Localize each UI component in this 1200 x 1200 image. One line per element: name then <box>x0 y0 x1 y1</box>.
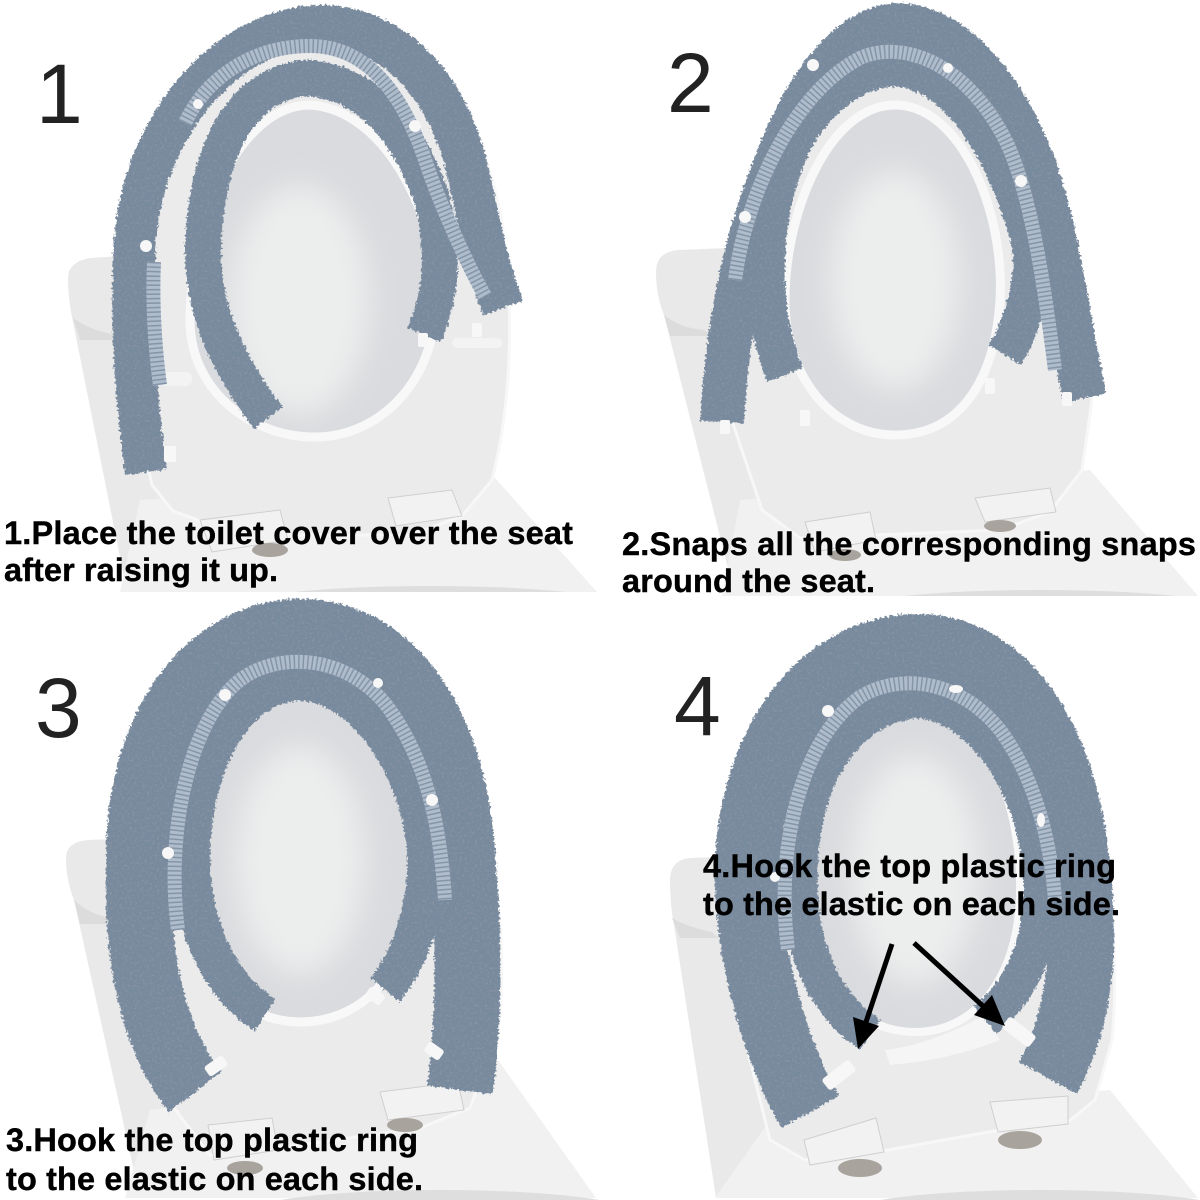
arrow: to right ring <box>914 943 1005 1026</box>
caption 3: to the elastic on each side. <box>6 1161 423 1197</box>
caption 4: to the elastic on each side. <box>703 886 1120 922</box>
seat cover, outer strand <box>748 647 1081 1112</box>
toilet seat <box>728 618 1115 1177</box>
snaps and plastic rings <box>770 685 1045 1091</box>
snaps <box>720 59 1072 434</box>
caption 1 <box>4 515 573 588</box>
caption 3 <box>6 1122 423 1197</box>
panel: step 2 <box>622 25 1200 630</box>
elastic edge <box>735 52 1055 370</box>
caption 1: after raising it up. <box>4 552 278 588</box>
caption 3: 3.Hook the top plastic ring <box>6 1122 418 1158</box>
snaps <box>140 99 482 462</box>
seat cover, inner strand <box>799 700 1041 1035</box>
toilet tank and bowl <box>656 246 1200 630</box>
seat cover, inner strand <box>203 78 440 418</box>
caption 2: 2.Snaps all the corresponding snaps <box>622 526 1196 562</box>
step number 1: 1 <box>36 47 83 141</box>
elastic edge <box>785 683 1055 950</box>
panel: step 1 <box>4 20 620 626</box>
toilet tank and bowl <box>670 854 1200 1200</box>
caption 4 <box>703 848 1120 922</box>
toilet seat <box>123 605 502 1175</box>
seat cover, inner strand <box>766 68 1032 375</box>
toilet tank and bowl <box>66 836 630 1200</box>
seat cover, outer strand <box>133 26 503 472</box>
arrow: to left ring <box>853 944 892 1049</box>
step number 3: 3 <box>35 661 82 755</box>
caption 1: 1.Place the toilet cover over the seat <box>4 515 573 551</box>
caption 2: around the seat. <box>622 563 875 599</box>
toilet seat <box>131 20 510 557</box>
snaps and plastic rings <box>162 678 445 1077</box>
step number 4: 4 <box>674 659 721 753</box>
caption 4: 4.Hook the top plastic ring <box>703 848 1116 884</box>
caption 2 <box>622 526 1196 599</box>
panel: step 3 <box>6 605 630 1200</box>
elastic edge <box>153 46 485 385</box>
elastic edge <box>175 662 445 930</box>
panel: step 4 <box>670 618 1200 1200</box>
step number 2: 2 <box>667 36 714 130</box>
seat cover, outer strand <box>139 632 467 1092</box>
toilet seat <box>725 30 1092 561</box>
toilet tank and bowl <box>68 256 596 592</box>
seat cover, outer strand <box>722 25 1085 422</box>
seat cover, inner strand <box>191 682 426 1015</box>
